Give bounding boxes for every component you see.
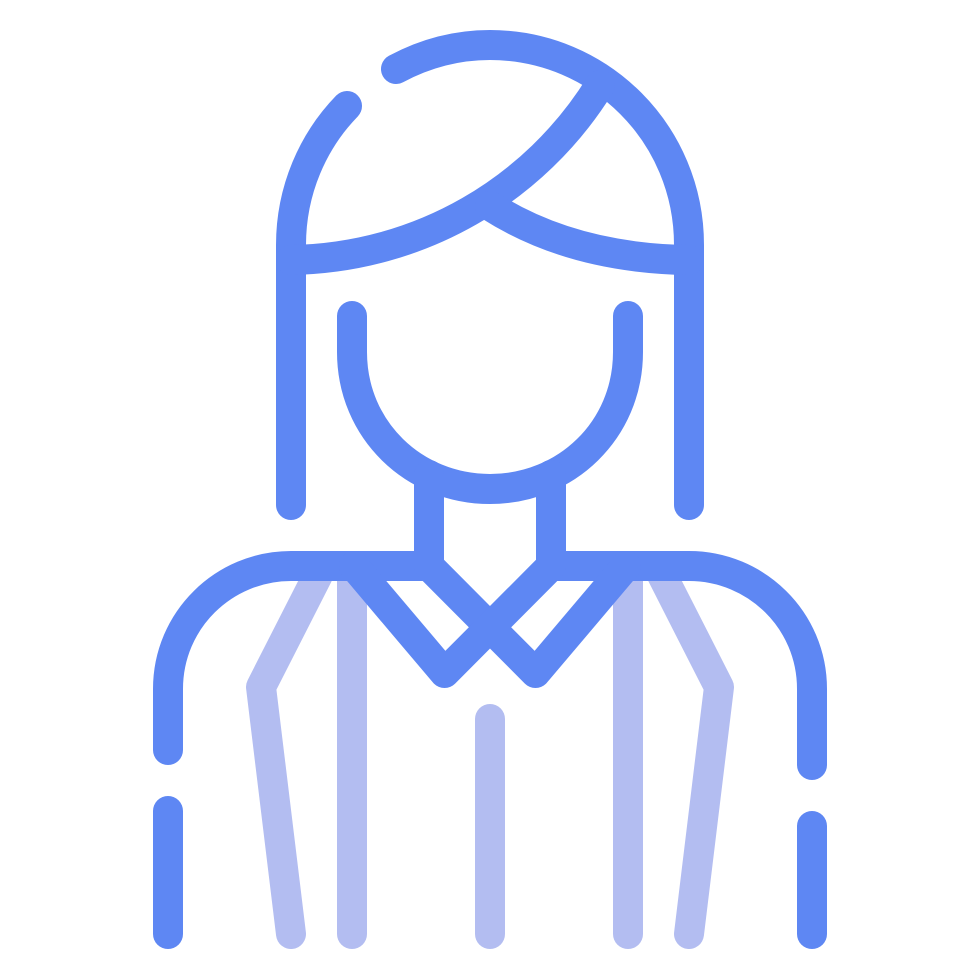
face	[352, 316, 628, 489]
dark outline	[168, 45, 812, 934]
left lapel outer line	[261, 575, 318, 934]
fringe left sweep	[291, 85, 600, 260]
right shoulder	[551, 566, 812, 765]
right inner line	[613, 575, 643, 934]
hair top arc	[396, 45, 689, 505]
centre line	[475, 719, 505, 934]
blazer light lines	[261, 575, 719, 934]
left inner line	[337, 575, 367, 934]
left shoulder	[168, 566, 429, 750]
right lapel outer line	[662, 575, 719, 934]
hair left side	[291, 106, 347, 505]
left arm lower	[153, 811, 183, 934]
right arm lower	[797, 826, 827, 934]
neck and collar	[354, 475, 626, 673]
fringe right sweep	[490, 206, 689, 260]
